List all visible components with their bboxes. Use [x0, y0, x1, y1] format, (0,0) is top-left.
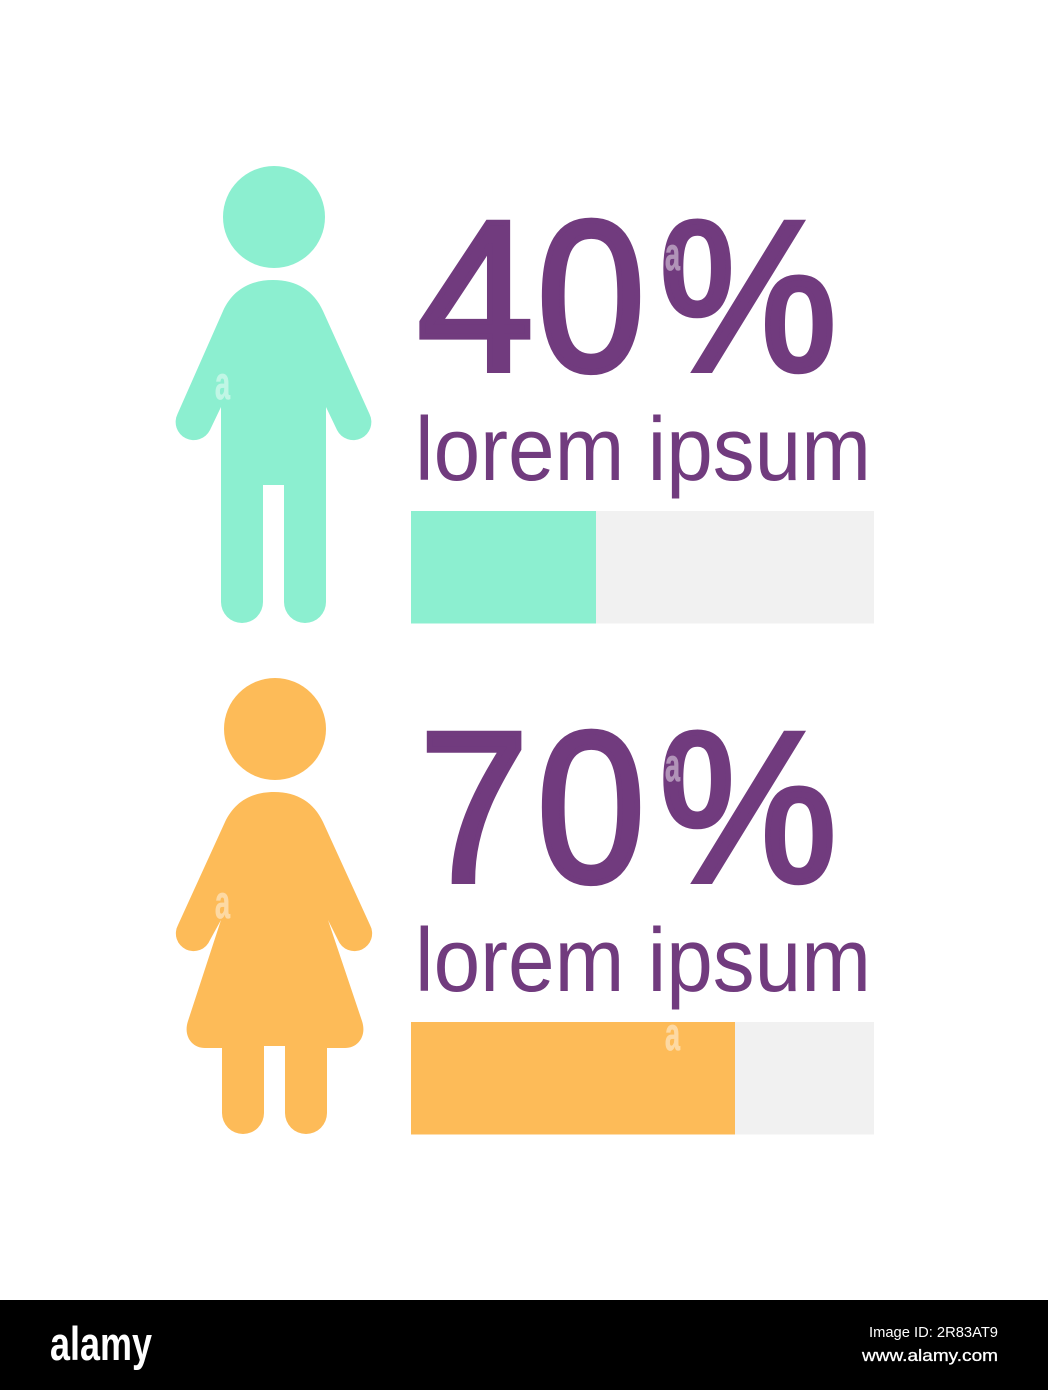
watermark marks: a [665, 228, 680, 280]
watermark marks: a [665, 1008, 680, 1060]
stat: 70%: % [659, 688, 837, 927]
progress bar: 70% [411, 1022, 874, 1134]
stat: 40%: % [659, 177, 837, 416]
stat: 40%: 4 [418, 177, 534, 416]
watermark marks [215, 228, 680, 1060]
watermark marks: a [665, 739, 680, 791]
watermark marks: a [215, 357, 230, 409]
label: lorem ipsum 1: lorem ipsum [415, 400, 871, 500]
footer url: www.alamy.com [861, 1346, 998, 1365]
footer logo: alamy: alamy [50, 1317, 152, 1370]
label: lorem ipsum 2: lorem ipsum [415, 911, 871, 1011]
watermark marks: a [215, 876, 230, 928]
stat: 70% [420, 688, 837, 927]
icon: male figure [176, 166, 371, 623]
progress bar: 40% [411, 511, 874, 624]
stat: 70%: 7 [420, 688, 528, 927]
icon: female figure [176, 678, 372, 1134]
stat: 40%: 0 [537, 177, 645, 416]
stat: 40% [418, 177, 837, 416]
footer image id: Image ID: 2R83AT9 [869, 1324, 998, 1341]
stat: 70%: 0 [537, 688, 645, 927]
footer bar [0, 1300, 1048, 1390]
